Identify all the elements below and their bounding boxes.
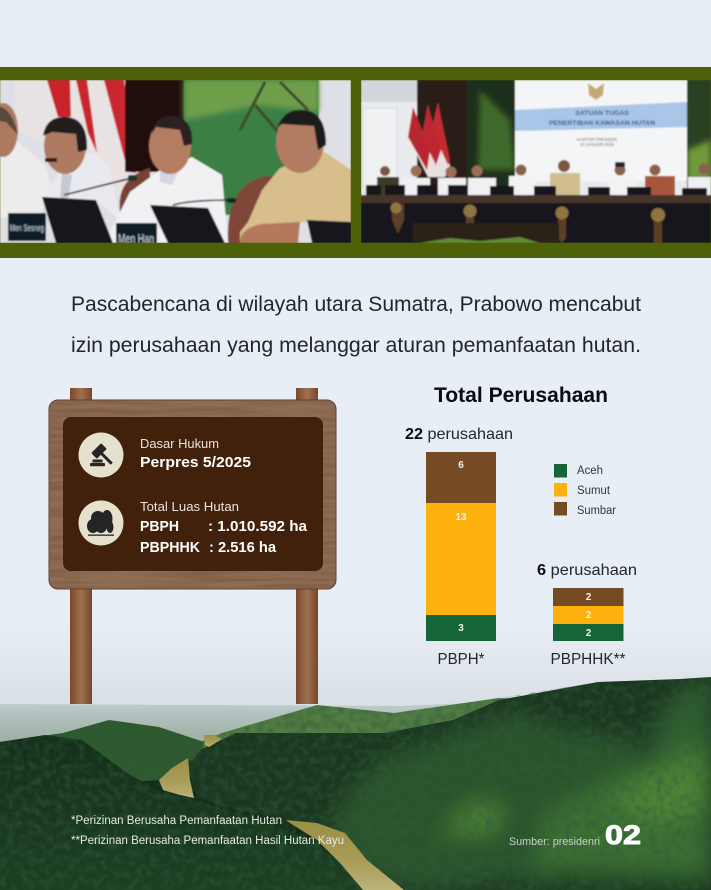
intro text: Pascabencana di wilayah utara Sumatra, Prabowo mencabut: [71, 293, 641, 316]
landscape photo: forest hills and river: [0, 670, 711, 890]
stacked bar: PBPH: PBPH*: [438, 651, 484, 668]
person: Men Sesneg side: [42, 117, 122, 222]
flags: [408, 103, 450, 177]
icon: gavel: [78, 432, 124, 478]
footnotes: *Perizinan Berusaha Pemanfaatan Hutan: [71, 815, 282, 827]
legend: Sumut: [577, 485, 611, 497]
stacked bar: PBPHHK: 2: [586, 610, 592, 621]
conference table: [361, 195, 711, 243]
stacked bar: PBPH: [405, 426, 513, 668]
total luas hutan text: : 1.010.592 ha: [208, 518, 308, 535]
stacked bar: PBPHHK: 6 perusahaan: [537, 562, 637, 579]
total luas hutan text: PBPHHK: [140, 539, 200, 556]
name tag: Men Sesneg: Men Sesneg: [10, 223, 44, 234]
forest wall panel: [184, 80, 319, 215]
dasar hukum text: Dasar Hukum: [140, 436, 219, 451]
total luas hutan text: : 2.516 ha: [209, 539, 277, 556]
source: Sumber: presidenri: [509, 836, 600, 848]
stacked bar: PBPHHK: PBPHHK**: [550, 651, 626, 668]
total luas hutan text: PBPH: [140, 518, 179, 535]
intro text: [71, 293, 641, 357]
right hills: [180, 670, 711, 890]
total luas hutan text: [140, 499, 308, 556]
photo: ministers at the table: [0, 80, 351, 246]
icon: forest trees: [78, 500, 124, 546]
people row: [377, 160, 711, 198]
chairs: [120, 168, 150, 215]
stacked bar: PBPH: 13: [455, 512, 467, 523]
stacked bar: PBPH: 6: [458, 460, 464, 471]
dasar hukum text: [140, 436, 251, 471]
presentation screen: KANTOR PRESIDEN: [577, 137, 617, 142]
door: [363, 108, 397, 188]
canopy texture: [0, 677, 711, 890]
stacked bar: PBPH: 3: [458, 623, 464, 634]
person: khaki uniform: [240, 110, 351, 243]
sign inner panel: [63, 417, 323, 571]
emblem: [588, 83, 604, 100]
footnotes: [71, 815, 344, 847]
monitors: [42, 197, 113, 243]
dark wall panel: [125, 80, 184, 172]
name tag: Men Han: [116, 223, 157, 246]
name tag: Men Han: Men Han: [118, 231, 154, 246]
sign posts: [70, 388, 318, 704]
stacked bar: PBPH: 22 perusahaan: [405, 426, 513, 443]
river: [159, 735, 404, 890]
page number: 02: [605, 820, 641, 850]
hazy distance: [0, 697, 520, 760]
footnotes: **Perizinan Berusaha Pemanfaatan Hasil Hutan Kayu: [71, 835, 344, 847]
presentation screen: PENERTIBAN KAWASAN HUTAN: [549, 120, 655, 127]
flag: [15, 80, 136, 195]
legend: [554, 464, 616, 517]
intro text: izin perusahaan yang melanggar aturan pemanfaatan hutan.: [71, 334, 641, 357]
stacked bar: PBPHHK: 2: [586, 592, 592, 603]
legend: Sumbar: [577, 505, 616, 517]
underlay: [0, 760, 420, 890]
person far left: [0, 103, 52, 218]
far left hill: [0, 720, 204, 795]
heading: Total Perusahaan: Total Perusahaan: [434, 384, 608, 407]
dark wall and forest panels: [417, 80, 711, 195]
stacked bar: PBPHHK: [537, 562, 637, 668]
dasar hukum text: Perpres 5/2025: [140, 454, 251, 471]
wooden sign: [49, 388, 336, 704]
stacked bar: PBPHHK: 2: [586, 628, 592, 639]
microphones: [64, 178, 233, 205]
total luas hutan text: Total Luas Hutan: [140, 499, 239, 514]
green photo band: [0, 67, 711, 258]
presentation screen: 23 JANUARI 2026: [580, 142, 615, 147]
mid hill: [200, 698, 540, 760]
name tag: Men Sesneg: [8, 213, 46, 241]
desk monitors: [365, 184, 708, 196]
legend: Aceh: [577, 465, 603, 477]
presentation screen: [515, 80, 687, 181]
photo: task force meeting: [361, 80, 711, 243]
dark left foreground hill: [0, 735, 363, 890]
sign board: [49, 400, 336, 589]
presentation screen: SATUAN TUGAS: [575, 110, 629, 117]
person: centre: [110, 116, 228, 243]
